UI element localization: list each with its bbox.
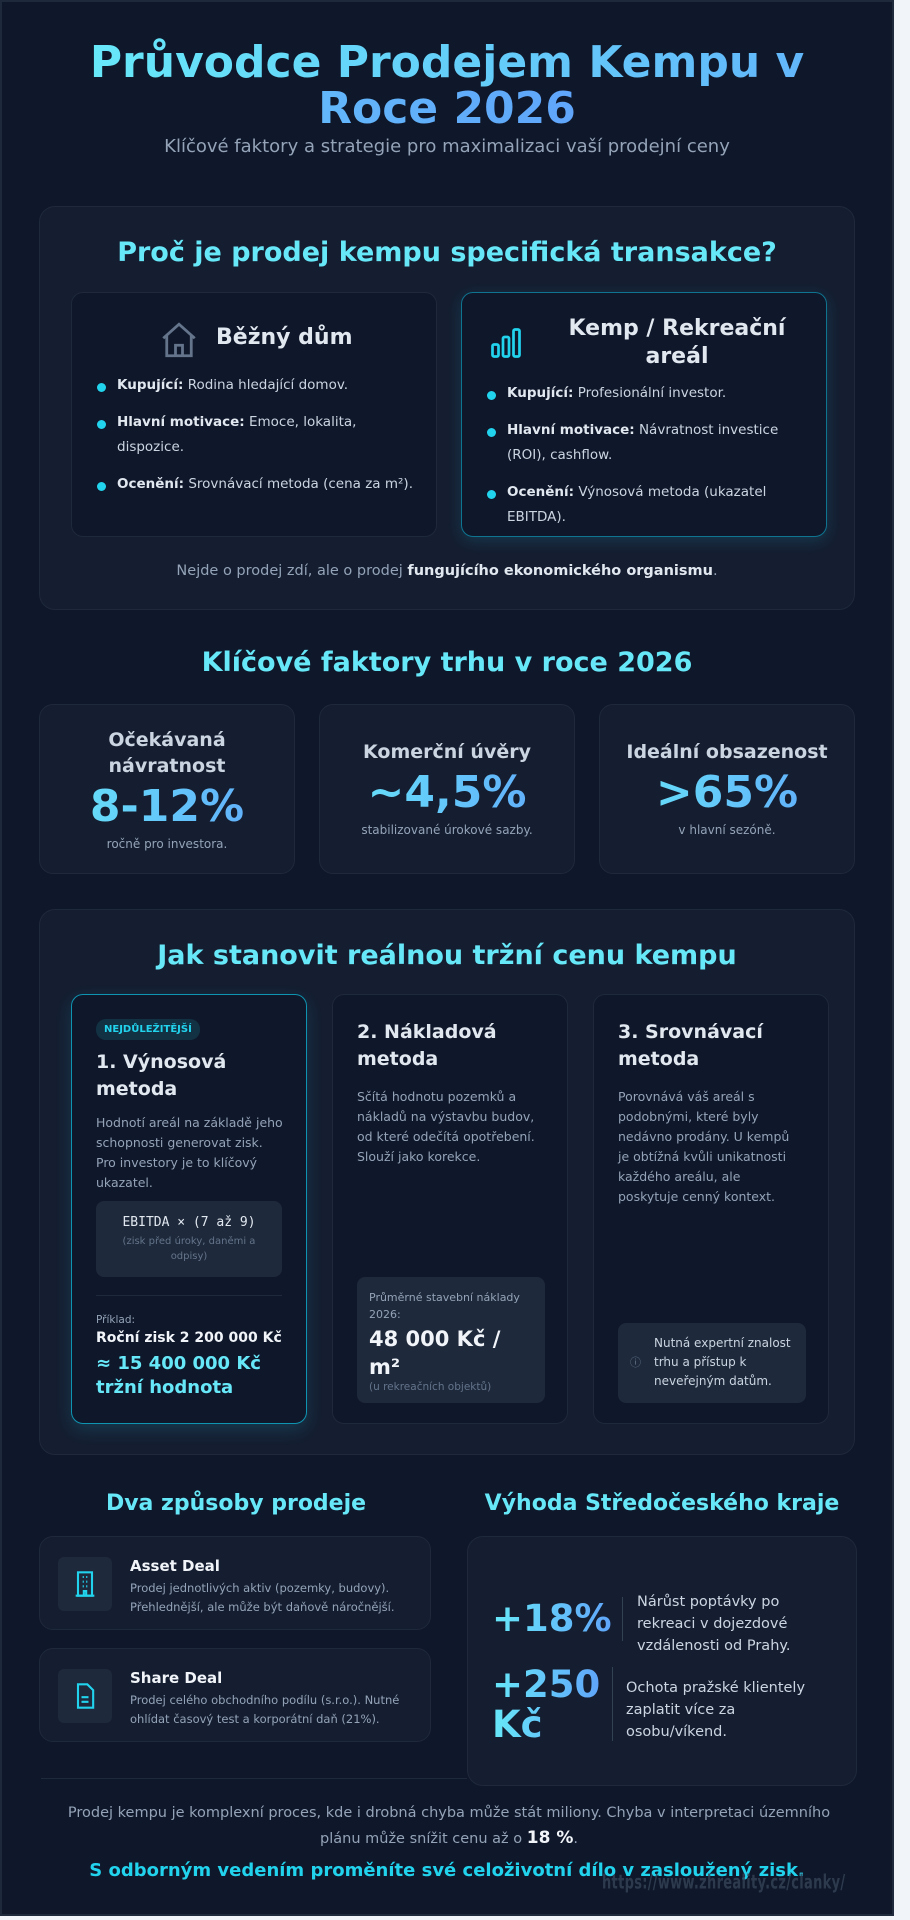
bullet list: Kupující: Profesionální investor. xyxy=(507,385,726,401)
stat: occupancy xyxy=(599,704,855,874)
panel: why specific xyxy=(39,206,855,610)
card: asset deal: Prodej jednotlivých aktiv (pozemky, budovy). Přehlednější, ale může být daňově náročnější. xyxy=(130,1581,394,1614)
stat: return: Očekávaná xyxy=(108,729,226,751)
icon: house xyxy=(162,322,196,358)
stat: loans: ~4,5% xyxy=(368,767,526,818)
formula box xyxy=(96,1201,282,1277)
badge: NEJDŮLEŽITĚJŠÍ xyxy=(104,1024,192,1035)
card: comparative method: 3. Srovnávací metoda xyxy=(618,1021,763,1070)
card: asset deal xyxy=(39,1536,431,1630)
stat: loans: Komerční úvěry xyxy=(363,741,531,763)
bullet list xyxy=(487,385,778,525)
stat: return: ročně pro investora. xyxy=(107,837,227,851)
card: comparative method xyxy=(593,994,829,1424)
card: regular house xyxy=(71,292,437,537)
stat: demand xyxy=(492,1594,791,1654)
card: income method: 1. Výnosová metoda xyxy=(96,1051,226,1100)
card: cost method: Sčítá hodnotu pozemků a nákladů na výstavbu budov, od které odečítá opotřebení. Slouží jako korekce. xyxy=(357,1089,535,1164)
title xyxy=(90,37,804,134)
icon: document xyxy=(58,1669,112,1723)
watermark: https://www.zhreality.cz/clanky/ xyxy=(602,1872,845,1894)
heading: region advantage: Výhoda Středočeského kraje xyxy=(485,1491,839,1516)
example xyxy=(96,1295,282,1400)
stat: demand: +18% xyxy=(492,1597,612,1640)
info box: ⓘ xyxy=(630,1356,641,1369)
cost box: 48 000 Kč / m² xyxy=(369,1327,500,1379)
bullet list: Kupující: Rodina hledající domov. xyxy=(117,377,348,393)
stat: demand: Nárůst poptávky po rekreaci v dojezdové vzdálenosti od Prahy. xyxy=(637,1594,791,1654)
icon: chart xyxy=(491,328,521,358)
card: income method: Hodnotí areál na základě jeho schopnosti generovat zisk. Pro investory je to klíčový ukazatel. xyxy=(96,1115,283,1190)
stat: occupancy: >65% xyxy=(656,767,798,818)
card heading: Běžný dům xyxy=(216,325,352,350)
stat: willingness to pay: Kč xyxy=(492,1703,543,1746)
heading: Proč je prodej kempu specifická transakce? xyxy=(117,237,777,268)
card: income method xyxy=(71,994,307,1424)
card: asset deal: Asset Deal xyxy=(130,1557,220,1575)
example: ≈ 15 400 000 Kč tržní hodnota xyxy=(96,1353,261,1398)
bullet list: Hlavní motivace: Emoce, lokalita, dispozice. xyxy=(117,414,356,455)
card: camp xyxy=(461,292,827,537)
info box xyxy=(618,1323,806,1403)
stat: loans xyxy=(319,704,575,874)
info box: Nutná expertní znalost trhu a přístup k neveřejným datům. xyxy=(654,1336,791,1388)
closing line: S odborným vedením proměníte své celoživotní dílo v zasloužený zisk. xyxy=(89,1860,805,1881)
card: share deal: Share Deal xyxy=(130,1669,222,1687)
heading: Jak stanovit reálnou tržní cenu kempu xyxy=(157,940,737,971)
stat: return: 8-12% xyxy=(90,781,244,832)
stat: willingness to pay xyxy=(492,1663,805,1746)
bullet list xyxy=(97,377,413,492)
cost box: (u rekreačních objektů) xyxy=(369,1381,491,1393)
example: Roční zisk 2 200 000 Kč xyxy=(96,1330,282,1346)
icon: building xyxy=(58,1557,112,1611)
heading: market factors: Klíčové faktory trhu v roce 2026 xyxy=(202,647,692,678)
footer text: Prodej kempu je komplexní proces, kde i drobná chyba může stát miliony. Chyba v interpretaci územního plánu může snížit cenu až o 18 %. xyxy=(68,1805,830,1848)
stat: return xyxy=(39,704,295,874)
formula box: EBITDA × (7 až 9) xyxy=(122,1215,256,1230)
stat: loans: stabilizované úrokové sazby. xyxy=(361,823,533,837)
subtitle: Klíčové faktory a strategie pro maximalizaci vaší prodejní ceny xyxy=(164,136,730,157)
card: comparative method: Porovnává váš areál s podobnými, které byly nedávno prodány. U kempů je obtížná kvůli unikatnosti každého areálu, ale poskytuje cenný kontext. xyxy=(618,1089,789,1204)
badge xyxy=(96,1019,200,1040)
bullet list: Ocenění: Srovnávací metoda (cena za m²). xyxy=(117,476,413,492)
panel: valuation methods xyxy=(39,909,855,1455)
cost box: Průměrné stavební náklady 2026: xyxy=(369,1291,520,1321)
title: Roce 2026 xyxy=(318,83,576,134)
stat: return: návratnost xyxy=(108,755,225,777)
card: cost method xyxy=(332,994,568,1424)
title: Průvodce Prodejem Kempu v xyxy=(90,37,804,88)
card: cost method: 2. Nákladová metoda xyxy=(357,1021,497,1070)
summary text: Nejde o prodej zdí, ale o prodej fungujícího ekonomického organismu. xyxy=(176,563,718,579)
heading: two ways: Dva způsoby prodeje xyxy=(106,1491,366,1516)
card: share deal: Prodej celého obchodního podílu (s.r.o.). Nutné ohlídat časový test a korporátní daň (21%). xyxy=(130,1693,399,1726)
card heading: Kemp / Rekreační areál xyxy=(569,316,785,369)
stat: willingness to pay: +250 xyxy=(492,1663,600,1706)
stat: occupancy: Ideální obsazenost xyxy=(626,741,828,763)
formula box: (zisk před úroky, daněmi a odpisy) xyxy=(123,1236,255,1262)
stat: willingness to pay: Ochota pražské klientely zaplatit více za osobu/víkend. xyxy=(626,1680,805,1740)
card: share deal xyxy=(39,1648,431,1742)
cost box xyxy=(357,1277,545,1403)
example: Příklad: xyxy=(96,1314,135,1326)
panel: region stats xyxy=(467,1536,857,1786)
bullet list: Hlavní motivace: Návratnost investice (ROI), cashflow. xyxy=(507,422,778,463)
bullet list: Ocenění: Výnosová metoda (ukazatel EBITDA). xyxy=(507,484,766,525)
stat: occupancy: v hlavní sezóně. xyxy=(678,823,776,837)
